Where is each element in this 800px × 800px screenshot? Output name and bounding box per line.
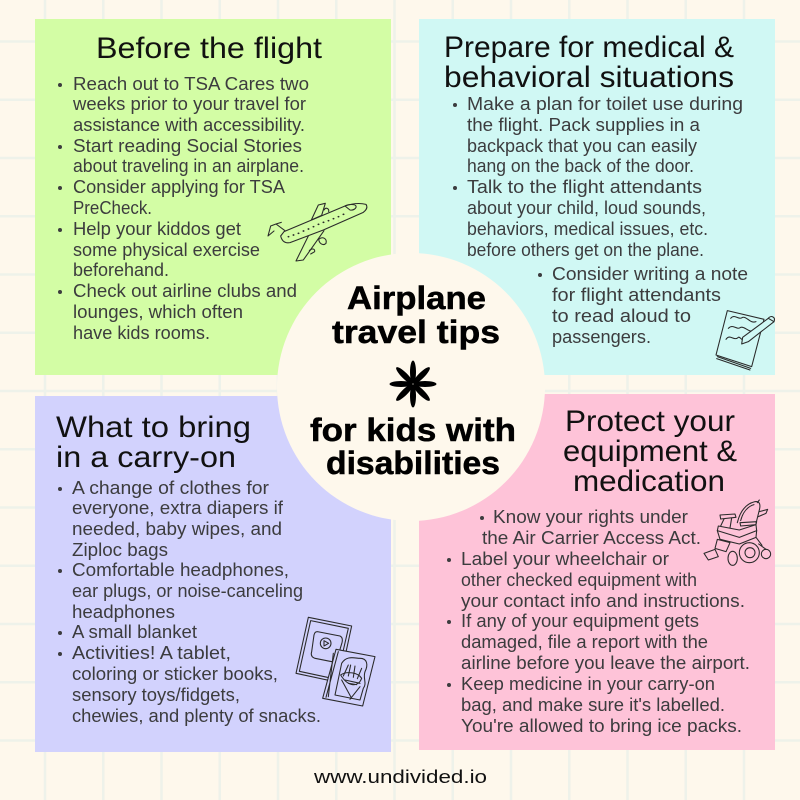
panel: protect your equipment and medication: [419, 394, 775, 750]
tips list: equipment and medication: damaged, file a report with the: [461, 632, 708, 652]
heading: before the flight: Before the flight: [96, 32, 323, 65]
tips list: equipment and medication: airline before you leave the airport.: [461, 653, 750, 673]
tips list: carry-on: A small blanket: [72, 622, 197, 642]
tips list: medical and behavioral: backpack that you can easily: [467, 136, 697, 156]
heading: what to bring in a carry-on: in a carry-on: [56, 441, 236, 474]
heading: what to bring in a carry-on: What to bring: [56, 411, 251, 444]
tips list: medical and behavioral: to read aloud to: [552, 306, 691, 326]
tips list: equipment and medication: [447, 507, 750, 736]
heading: protect your equipment and medication: medication: [573, 465, 725, 498]
title: airplane travel tips: travel tips: [332, 314, 500, 350]
tips list: before the flight: lounges, which often: [73, 302, 243, 322]
heading: what to bring in a carry-on: [56, 411, 251, 474]
tips list: before the flight: Check out airline clubs and: [73, 281, 297, 301]
tips list: equipment and medication: the Air Carrier Access Act.: [482, 528, 701, 548]
tips list: medical and behavioral: the flight. Pack supplies in a: [467, 115, 701, 135]
heading: protect your equipment and medication: Protect your: [565, 405, 735, 438]
tips list: carry-on: A change of clothes for: [72, 478, 269, 498]
icon: power wheelchair: [704, 500, 771, 565]
tips list: carry-on: [58, 478, 321, 726]
tips list: medical and behavioral: hang on the back of the door.: [467, 156, 694, 176]
panel: prepare for medical and behavioral situations: [419, 19, 775, 375]
footer: website: www.undivided.io: [313, 767, 487, 787]
tips list: medical and behavioral: behaviors, medical issues, etc.: [467, 219, 708, 239]
tips list: medical and behavioral: passengers.: [552, 327, 651, 347]
tips list: equipment and medication: Keep medicine in your carry-on: [461, 674, 715, 694]
heading: protect your equipment and medication: [563, 405, 737, 498]
tips list: medical and behavioral: Make a plan for toilet use during: [467, 94, 743, 114]
tips list: medical and behavioral: Talk to the flight attendants: [467, 177, 702, 197]
tips list: carry-on: ear plugs, or noise-canceling: [72, 581, 303, 601]
tips list: equipment and medication: Know your rights under: [493, 507, 688, 527]
tips list: medical and behavioral: before others get on the plane.: [467, 240, 704, 260]
heading: prepare for medical and behavioral situations: [444, 31, 734, 94]
tips list: carry-on: chewies, and plenty of snacks.: [72, 706, 321, 726]
tips list: carry-on: sensory toys/fidgets,: [72, 685, 240, 705]
tips list: before the flight: assistance with accessibility.: [73, 115, 305, 135]
tips list: carry-on: Activities! A tablet,: [72, 643, 231, 663]
subtitle: for kids with disabilities: [310, 412, 516, 481]
tips list: before the flight: weeks prior to your travel for: [72, 94, 306, 114]
tips list: carry-on: Ziploc bags: [72, 540, 168, 560]
heading: prepare for medical and behavioral situations: behavioral situations: [444, 61, 734, 94]
tips list: before the flight: Start reading Social Stories: [73, 136, 302, 156]
tips list: equipment and medication: your contact info and instructions.: [461, 591, 745, 611]
tips list: equipment and medication: If any of your equipment gets: [461, 611, 699, 631]
subtitle: for kids with disabilities: disabilities: [326, 445, 500, 481]
icon: notepad and pen: [716, 311, 774, 370]
icon: airplane: [268, 203, 367, 261]
tips list: before the flight: beforehand.: [73, 260, 169, 280]
tips list: before the flight: [58, 74, 309, 343]
panel: before the flight: [35, 19, 391, 375]
tips list: medical and behavioral: [453, 94, 748, 347]
tips list: carry-on: Comfortable headphones,: [72, 560, 289, 580]
tips list: medical and behavioral: for flight attendants: [552, 285, 721, 305]
tips list: carry-on: headphones: [72, 602, 175, 622]
heading: protect your equipment and medication: equipment &: [563, 435, 737, 468]
tips list: before the flight: Help your kiddos get: [73, 219, 241, 239]
tips list: medical and behavioral: about your child, loud sounds,: [467, 198, 706, 218]
icon: eight-petal flower: [390, 360, 436, 408]
tips list: before the flight: about traveling in an airplane.: [73, 156, 304, 176]
tips list: before the flight: Consider applying for TSA: [73, 177, 285, 197]
tips list: carry-on: everyone, extra diapers if: [72, 498, 284, 518]
subtitle: for kids with disabilities: for kids with: [310, 412, 516, 448]
tips list: medical and behavioral: Consider writing a note: [552, 264, 748, 284]
tips list: before the flight: some physical exercise: [73, 240, 260, 260]
tips list: before the flight: Reach out to TSA Cares two: [73, 74, 309, 94]
tips list: carry-on: coloring or sticker books,: [72, 664, 278, 684]
panel: what to bring in a carry-on: [35, 396, 391, 752]
tips list: equipment and medication: bag, and make sure it's labelled.: [461, 695, 725, 715]
tips list: carry-on: needed, baby wipes, and: [72, 519, 282, 539]
tips list: equipment and medication: You're allowed to bring ice packs.: [461, 716, 742, 736]
center circle: [277, 253, 545, 521]
tips list: equipment and medication: Label your wheelchair or: [461, 549, 669, 569]
tips list: equipment and medication: other checked equipment with: [461, 570, 697, 590]
icon: tablet and coloring book: [296, 617, 375, 706]
title: airplane travel tips: [332, 280, 500, 350]
tips list: before the flight: PreCheck.: [73, 198, 152, 218]
title: airplane travel tips: Airplane: [347, 280, 486, 316]
tips list: before the flight: have kids rooms.: [73, 323, 210, 343]
heading: prepare for medical and behavioral situations: Prepare for medical &: [444, 31, 734, 64]
